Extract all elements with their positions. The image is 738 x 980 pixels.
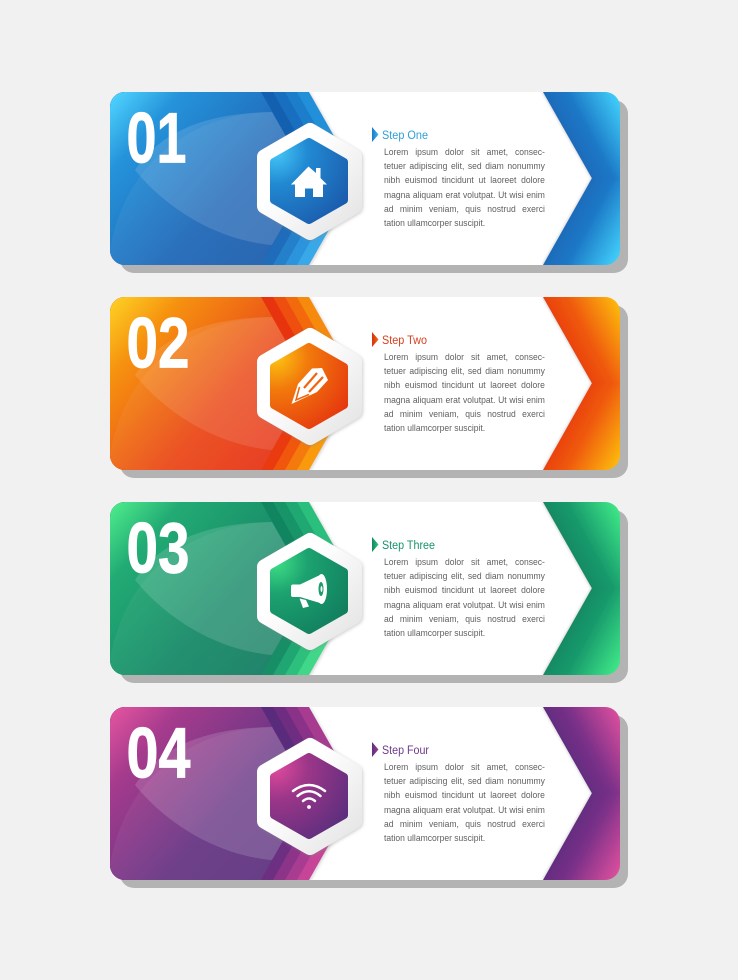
panel: step 3 — [110, 502, 628, 683]
text block: Lorem ipsum dolor sit amet, consec- — [384, 352, 545, 362]
text block — [384, 762, 545, 843]
text block: tetuer adipiscing elit, sed diam nonummy — [384, 366, 545, 376]
card shadow — [120, 305, 628, 478]
text block: nibh euismod tincidunt ut laoreet dolore — [384, 175, 545, 185]
card shadow — [120, 510, 628, 683]
card shadow — [120, 715, 628, 888]
step heading: Step One — [382, 130, 428, 142]
text block: nibh euismod tincidunt ut laoreet dolore — [384, 380, 545, 390]
text block: tation ullamcorper suscipit. — [384, 218, 485, 228]
text block: ad minim veniam, quis nostrud exerci — [384, 614, 545, 624]
text block: tetuer adipiscing elit, sed diam nonummy — [384, 571, 545, 581]
text block: magna aliquam erat volutpat. Ut wisi enim — [384, 190, 545, 200]
step heading — [372, 332, 427, 347]
left colour panel — [110, 502, 620, 675]
icon: pencil — [292, 368, 328, 404]
text block — [384, 147, 545, 228]
text block: ad minim veniam, quis nostrud exerci — [384, 819, 545, 829]
left colour panel — [110, 92, 620, 265]
right chevron — [543, 297, 620, 470]
step heading — [372, 742, 429, 757]
text block: ad minim veniam, quis nostrud exerci — [384, 409, 545, 419]
text block: Lorem ipsum dolor sit amet, consec- — [384, 147, 545, 157]
right chevron — [543, 707, 620, 880]
hexagon badge — [265, 336, 354, 437]
panel: step 2 — [110, 297, 628, 478]
text block — [384, 352, 545, 433]
left colour panel — [110, 707, 620, 880]
text block — [384, 557, 545, 638]
hexagon badge — [265, 541, 354, 642]
white content area — [200, 92, 600, 265]
panel: step 4 — [110, 707, 628, 888]
step heading — [372, 537, 435, 552]
text block: tation ullamcorper suscipit. — [384, 628, 485, 638]
icon: home — [291, 166, 327, 197]
text block: magna aliquam erat volutpat. Ut wisi enim — [384, 395, 545, 405]
text block: tetuer adipiscing elit, sed diam nonummy — [384, 776, 545, 786]
right chevron — [543, 502, 620, 675]
panel: step 1 — [110, 92, 628, 273]
step number: 03 — [126, 510, 190, 588]
step number: 02 — [126, 304, 190, 384]
step heading: Step Two — [382, 335, 427, 347]
step heading: Step Three — [382, 540, 435, 552]
text block: magna aliquam erat volutpat. Ut wisi enim — [384, 600, 545, 610]
icon: megaphone — [291, 574, 327, 608]
step heading — [372, 127, 428, 142]
white content area — [200, 297, 600, 470]
text block: Lorem ipsum dolor sit amet, consec- — [384, 557, 545, 567]
step number: 04 — [126, 714, 191, 794]
white content area — [200, 707, 600, 880]
text block: tation ullamcorper suscipit. — [384, 833, 485, 843]
step heading: Step Four — [382, 745, 429, 757]
step number: 01 — [126, 100, 186, 178]
hexagon badge — [265, 131, 354, 232]
text block: ad minim veniam, quis nostrud exerci — [384, 204, 545, 214]
text block: tation ullamcorper suscipit. — [384, 423, 485, 433]
white content area — [200, 502, 600, 675]
left colour panel — [110, 297, 620, 470]
icon: wifi — [293, 785, 325, 809]
hexagon badge — [265, 746, 354, 847]
text block: nibh euismod tincidunt ut laoreet dolore — [384, 790, 545, 800]
text block: tetuer adipiscing elit, sed diam nonummy — [384, 161, 545, 171]
text block: Lorem ipsum dolor sit amet, consec- — [384, 762, 545, 772]
card shadow — [120, 100, 628, 273]
text block: nibh euismod tincidunt ut laoreet dolore — [384, 585, 545, 595]
right chevron — [543, 92, 620, 265]
text block: magna aliquam erat volutpat. Ut wisi enim — [384, 805, 545, 815]
